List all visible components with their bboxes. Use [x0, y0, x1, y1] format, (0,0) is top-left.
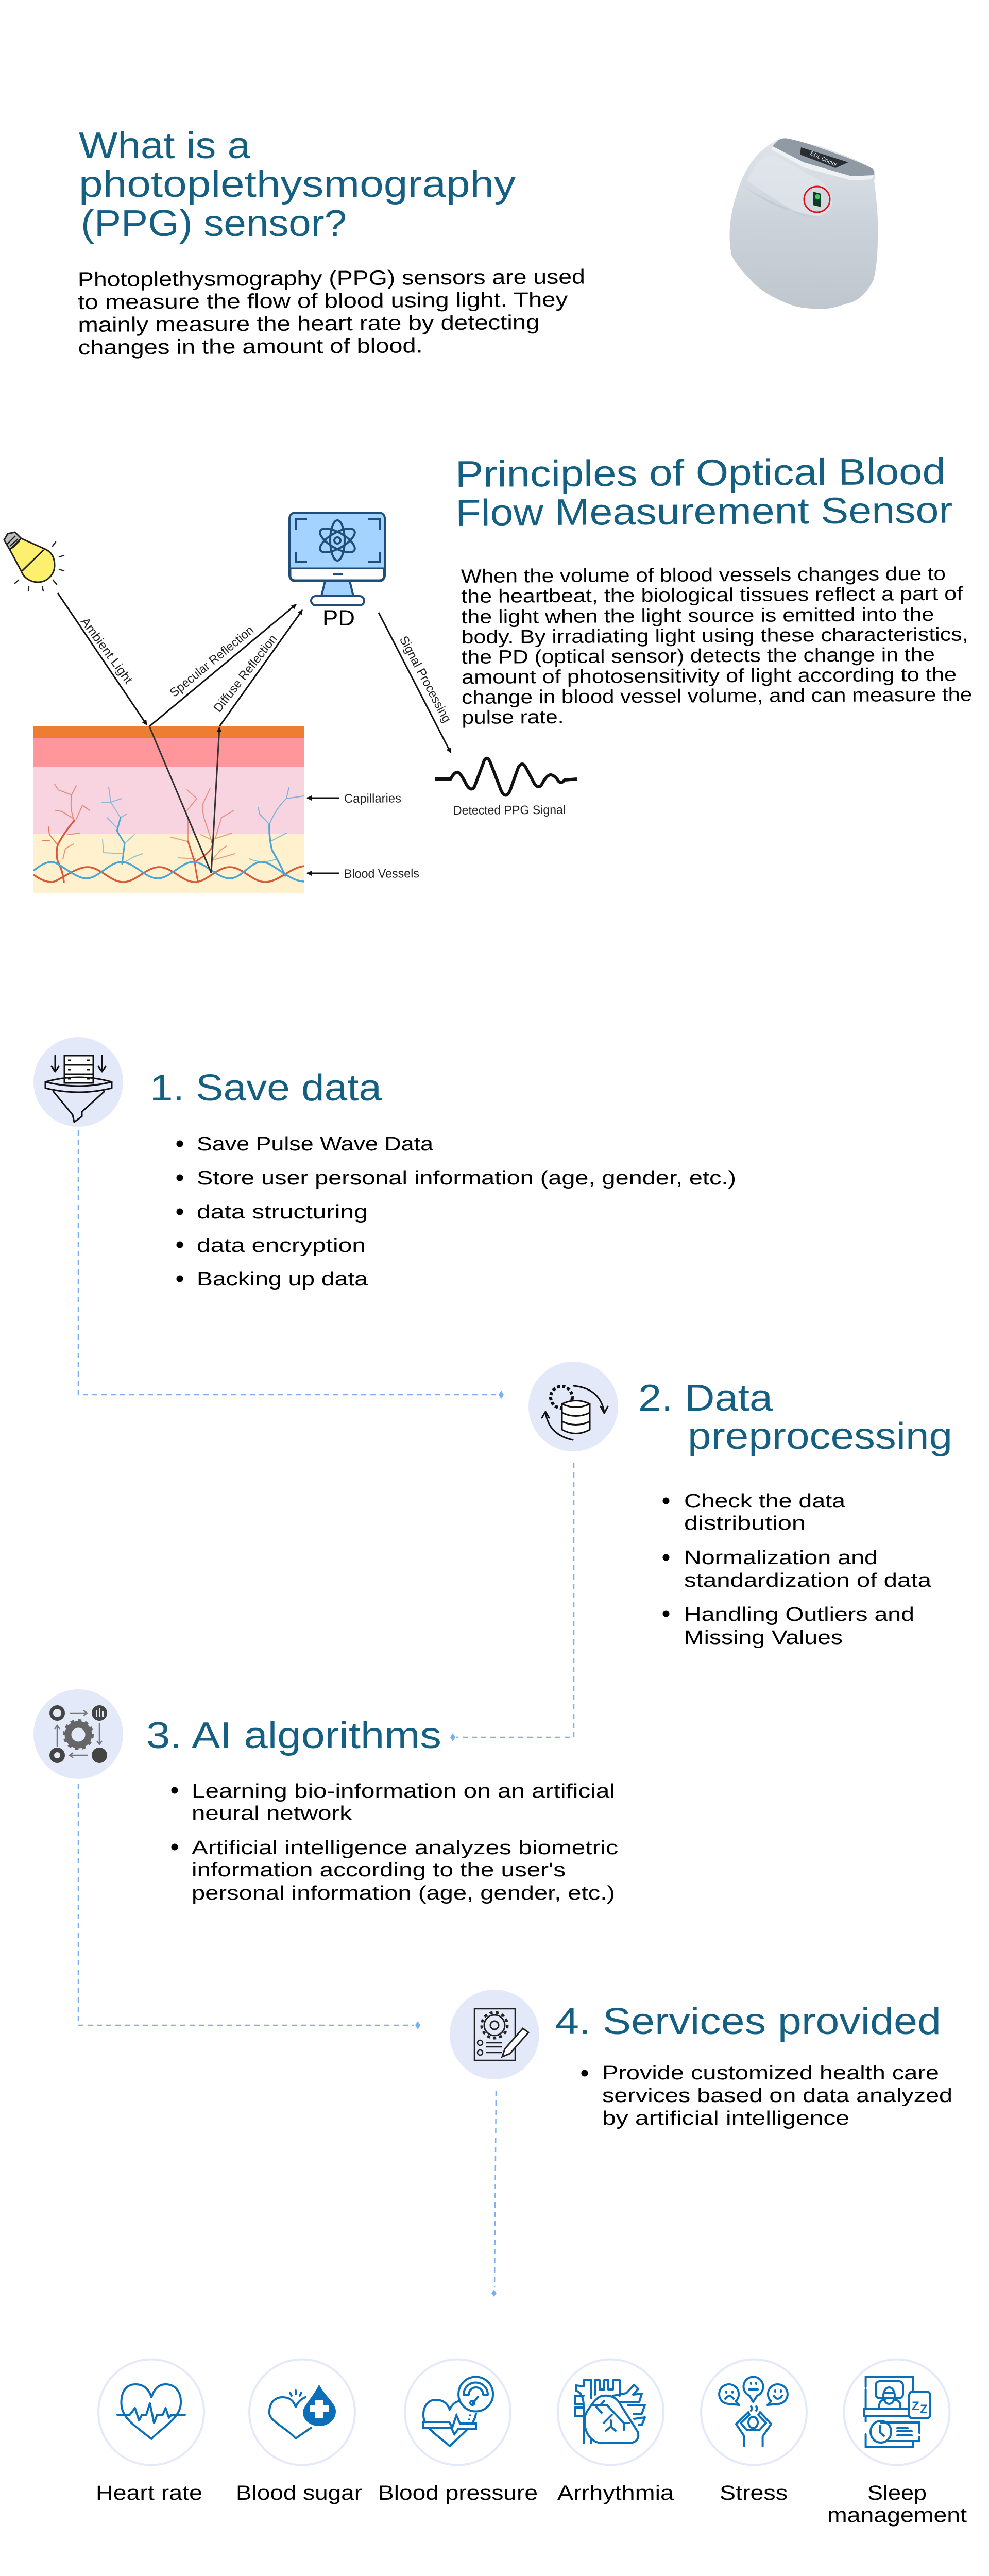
- heading: preprocessing: [688, 1416, 952, 1457]
- label: stress: Stress: [720, 2482, 788, 2504]
- image: PPG device with sensor: EDL Doctor: [809, 150, 838, 168]
- image: PPG device with sensor: [729, 138, 878, 309]
- bullet list: Learning bio-information on an artificial: [192, 1781, 615, 1802]
- service icon: stress: [701, 2360, 807, 2465]
- bullet list: Backing up data: [197, 1268, 368, 1290]
- icon: database cycle: [528, 1362, 618, 1451]
- title: What is a PPG sensor: (PPG) sensor?: [81, 203, 347, 244]
- bullet list: Store user personal information (age, gender, etc.): [197, 1167, 736, 1189]
- title: What is a PPG sensor: photoplethysmography: [79, 164, 516, 205]
- bullet list: Normalization and: [684, 1547, 878, 1569]
- heading: principles of optical blood flow: Principles of Optical Blood: [455, 451, 946, 495]
- arrow: signal processing: [379, 613, 451, 753]
- arrow: specular reflection: [149, 604, 296, 726]
- service icon: sleep management: [844, 2360, 950, 2465]
- heading: principles of optical blood flow: Flow Measurement Sensor: [455, 490, 953, 534]
- bullet list: data structuring: [197, 1201, 368, 1223]
- label: specular reflection: Specular Reflection: [167, 623, 257, 700]
- chart: detected PPG signal waveform: [435, 758, 577, 795]
- heading: 2. Data: [638, 1378, 773, 1419]
- connector: step 2 to step 3: [450, 1463, 574, 1741]
- label: heart rate: Heart rate: [96, 2482, 202, 2504]
- label: sleep management: [827, 2482, 967, 2527]
- bullet list: Provide customized health care: [602, 2062, 939, 2084]
- label: PD: PD: [322, 606, 355, 631]
- service icon: sleep management: Z: [920, 2402, 928, 2416]
- label: blood pressure: Blood pressure: [378, 2482, 538, 2504]
- service icon: heart rate: [98, 2360, 204, 2465]
- connector: step 1 to step 2: [78, 1130, 504, 1399]
- text block: PPG intro: changes in the amount of blood.: [78, 334, 423, 359]
- callout: blood vessels: Blood Vessels: [344, 867, 419, 881]
- text block: principle description: the heartbeat, the biological tissues reflect a part of: [461, 583, 963, 607]
- illustration: skin layers with vessels: [33, 726, 304, 893]
- heading: 3. AI algorithms: [146, 1715, 441, 1756]
- icon: data funnel: [33, 1037, 123, 1127]
- bullet list: [171, 1781, 618, 1904]
- bullet list: Missing Values: [684, 1627, 843, 1649]
- text block: principle description: pulse rate.: [462, 706, 564, 728]
- service icon: blood sugar: [249, 2360, 355, 2465]
- label: ambient light: Ambient Light: [78, 615, 135, 686]
- service icon: blood pressure: [405, 2360, 510, 2465]
- text block: principle description: [461, 563, 973, 728]
- text block: principle description: the PD (optical sensor) detects the change in the: [462, 644, 935, 668]
- label: arrhythmia: Arrhythmia: [557, 2482, 674, 2504]
- text block: PPG intro: mainly measure the heart rate by detecting: [78, 311, 540, 336]
- bullet list: Artificial intelligence analyzes biometric: [192, 1837, 618, 1859]
- text block: principle description: When the volume of blood vessels changes due to: [461, 563, 946, 587]
- heading: 1. Save data: [150, 1067, 382, 1109]
- text block: principle description: amount of photosensitivity of light according to the: [462, 664, 957, 688]
- bullet list: neural network: [192, 1803, 352, 1824]
- heading: principles of optical blood flow: [455, 451, 953, 534]
- text block: principle description: the light when the light source is emitted into the: [461, 604, 934, 628]
- arrow: diffuse reflection: [219, 610, 302, 726]
- label: signal processing: Signal Processing: [397, 634, 454, 725]
- icon: photodiode monitor: [289, 513, 385, 605]
- bullet list: information according to the user's: [192, 1859, 566, 1881]
- bullet list: standardization of data: [684, 1570, 932, 1591]
- text block: PPG intro: to measure the flow of blood using light. They: [78, 289, 568, 314]
- bullet list: Save Pulse Wave Data: [197, 1133, 434, 1155]
- text block: PPG intro: Photoplethysmography (PPG) sensors are used: [78, 265, 585, 291]
- label: detected PPG signal: Detected PPG Signal: [453, 803, 566, 818]
- bullet list: [581, 2062, 952, 2129]
- icon: algorithm cycle: [33, 1689, 123, 1779]
- step 4: services provided: [450, 1990, 952, 2129]
- text block: principle description: change in blood vessel volume, and can measure the: [462, 684, 972, 708]
- label: blood sugar: Blood sugar: [236, 2482, 362, 2504]
- heading: [638, 1378, 952, 1457]
- step 1: save data: [33, 1037, 736, 1290]
- bullet list: [662, 1490, 932, 1649]
- text block: PPG intro: [78, 265, 586, 359]
- bullet list: personal information (age, gender, etc.): [192, 1883, 615, 1904]
- service icon: sleep management: Z: [912, 2399, 919, 2413]
- bullet list: services based on data analyzed: [602, 2085, 952, 2107]
- bullet list: Handling Outliers and: [684, 1604, 914, 1625]
- connector: step 3 to step 4: [78, 1784, 420, 2029]
- text block: principle description: body. By irradiating light using these characteristics,: [461, 624, 968, 648]
- title: What is a PPG sensor: [79, 125, 516, 244]
- icon: light bulb: [4, 532, 64, 591]
- step 2: data preprocessing: [528, 1362, 952, 1649]
- heading: 4. Services provided: [555, 2001, 941, 2042]
- title: What is a PPG sensor: What is a: [79, 125, 251, 166]
- bullet list: distribution: [684, 1513, 806, 1534]
- connector: step 4 to services: [491, 2091, 497, 2297]
- bullet list: [176, 1133, 736, 1290]
- diagram: optical blood flow measurement: [4, 513, 577, 893]
- service icon: arrhythmia: [558, 2360, 663, 2465]
- icon: document with gear and pen: [450, 1990, 539, 2079]
- callout: capillaries: Capillaries: [344, 791, 401, 806]
- label: sleep management: management: [827, 2504, 967, 2527]
- bullet list: by artificial intelligence: [602, 2108, 849, 2129]
- label: diffuse reflection: Diffuse Reflection: [211, 632, 280, 715]
- label: sleep management: Sleep: [867, 2482, 927, 2504]
- arrow: ambient light: [58, 593, 147, 725]
- bullet list: Check the data: [684, 1490, 846, 1512]
- step 3: AI algorithms: [33, 1689, 618, 1904]
- bullet list: data encryption: [197, 1235, 366, 1257]
